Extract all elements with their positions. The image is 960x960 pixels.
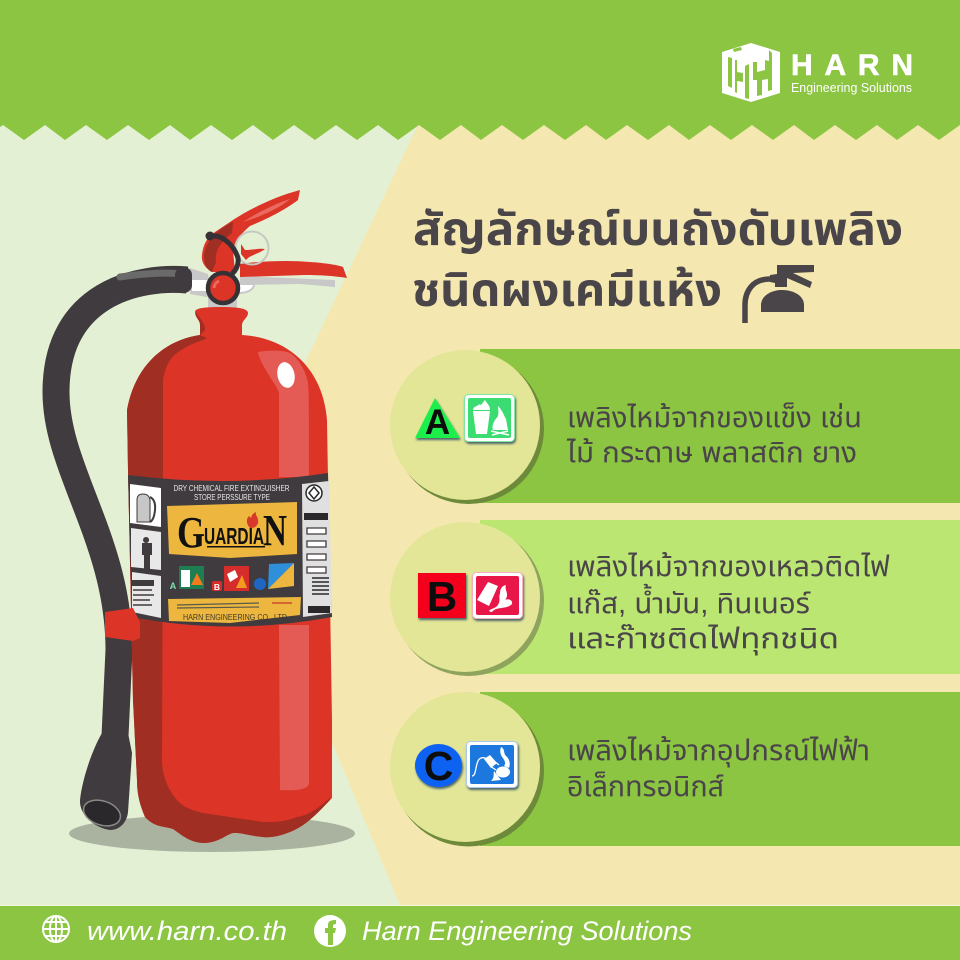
tank body bbox=[127, 307, 332, 843]
hose bbox=[56, 267, 192, 830]
circle A bbox=[390, 350, 540, 500]
panel: class B row bbox=[390, 520, 960, 676]
text B line 2: แก๊ส, น้ำมัน, ทินเนอร์ bbox=[567, 583, 811, 620]
panel: class C row bbox=[390, 692, 960, 846]
label band bbox=[128, 473, 332, 626]
logo tagline: Engineering Solutions bbox=[791, 80, 912, 95]
logo: HARN Engineering Solutions bbox=[722, 43, 913, 102]
text B bbox=[567, 551, 890, 655]
left label panels bbox=[130, 484, 161, 527]
valve and levers bbox=[202, 190, 347, 303]
title line 1: สัญลักษณ์บนถังดับเพลิง bbox=[413, 203, 903, 255]
blue and yellow class icon bbox=[268, 563, 294, 589]
icon: flammable liquid sign bbox=[472, 572, 522, 618]
text C line 2: อิเล็กทรอนิกส์ bbox=[567, 771, 724, 803]
safety pin wire bbox=[210, 236, 238, 274]
label band: B bbox=[214, 582, 220, 592]
hose clamp bbox=[105, 608, 140, 641]
icon: globe bbox=[43, 916, 69, 942]
panel: class A row bbox=[390, 349, 960, 504]
yellow brand plate bbox=[167, 502, 297, 558]
facebook page text: Harn Engineering Solutions bbox=[362, 916, 692, 946]
icon: class C circle bbox=[415, 743, 462, 789]
brand underline bbox=[207, 546, 265, 548]
text C line 1: เพลิงไหม้จากอุปกรณ์ไฟฟ้า bbox=[567, 735, 870, 767]
green class icon bbox=[179, 566, 204, 589]
nozzle bbox=[80, 733, 132, 830]
lower lever bbox=[240, 261, 347, 278]
upper lever bbox=[202, 190, 300, 272]
circle C bbox=[390, 692, 540, 842]
row band B bbox=[480, 520, 960, 674]
icon: class A triangle bbox=[415, 398, 460, 442]
small letter B bbox=[212, 581, 222, 591]
icon: class B square: B bbox=[427, 573, 457, 620]
brand name: UARDIA bbox=[204, 523, 264, 549]
circle B bbox=[390, 522, 540, 672]
manufacturer name: HARN ENGINEERING CO., LTD bbox=[183, 613, 287, 622]
background right arrow panel bbox=[235, 108, 960, 910]
red class icon bbox=[224, 566, 249, 591]
valve knob bbox=[208, 273, 238, 303]
text A line 2: ไม้ กระดาษ พลาสติก ยาง bbox=[566, 437, 857, 469]
icon: solid fuel fire sign bbox=[464, 394, 514, 442]
fire extinguisher illustration bbox=[56, 190, 355, 852]
right label panel bbox=[302, 481, 332, 617]
text A line 1: เพลิงไหม้จากของแข็ง เช่น bbox=[567, 402, 862, 434]
title line 2: ชนิดผงเคมีแห้ง bbox=[412, 264, 722, 316]
small letter A: A bbox=[170, 581, 177, 591]
brand name: N bbox=[263, 506, 287, 555]
text C bbox=[567, 735, 870, 803]
row band A bbox=[480, 349, 960, 503]
circle shadow A bbox=[393, 353, 544, 504]
icon: fire extinguisher pictogram bbox=[745, 265, 814, 323]
icon: class B square bbox=[418, 573, 466, 620]
icon: electrical fire sign bbox=[466, 742, 518, 788]
brand name: G bbox=[177, 508, 205, 557]
website text: www.harn.co.th bbox=[87, 916, 287, 946]
prong bbox=[241, 244, 265, 260]
ground shadow bbox=[69, 815, 355, 852]
header band with zigzag edge bbox=[0, 0, 960, 140]
label subheading: STORE PERSSURE TYPE bbox=[194, 493, 270, 502]
safety ring bbox=[236, 232, 268, 264]
label heading: DRY CHEMICAL FIRE EXTINGUISHER bbox=[174, 484, 290, 493]
title bbox=[412, 203, 903, 316]
icon: class C circle: C bbox=[424, 743, 453, 789]
yellow manufacturer plate bbox=[168, 597, 301, 623]
text B line 3: และก๊าซติดไฟทุกชนิด bbox=[567, 623, 839, 655]
footer band bbox=[0, 905, 960, 960]
icon: facebook bbox=[314, 915, 346, 947]
brand flame bbox=[247, 512, 258, 528]
valve stem and connector bbox=[190, 268, 335, 309]
icon: class A triangle: A bbox=[425, 403, 450, 442]
circle shadow B bbox=[393, 525, 544, 676]
brand name bbox=[177, 506, 287, 557]
logo wordmark: HARN bbox=[791, 49, 913, 82]
circle shadow C bbox=[393, 696, 544, 846]
small circle C bbox=[254, 578, 266, 590]
text A bbox=[566, 402, 862, 469]
row band C bbox=[480, 692, 960, 846]
logo icon bbox=[722, 43, 780, 102]
text B line 1: เพลิงไหม้จากของเหลวติดไฟ bbox=[567, 551, 890, 583]
